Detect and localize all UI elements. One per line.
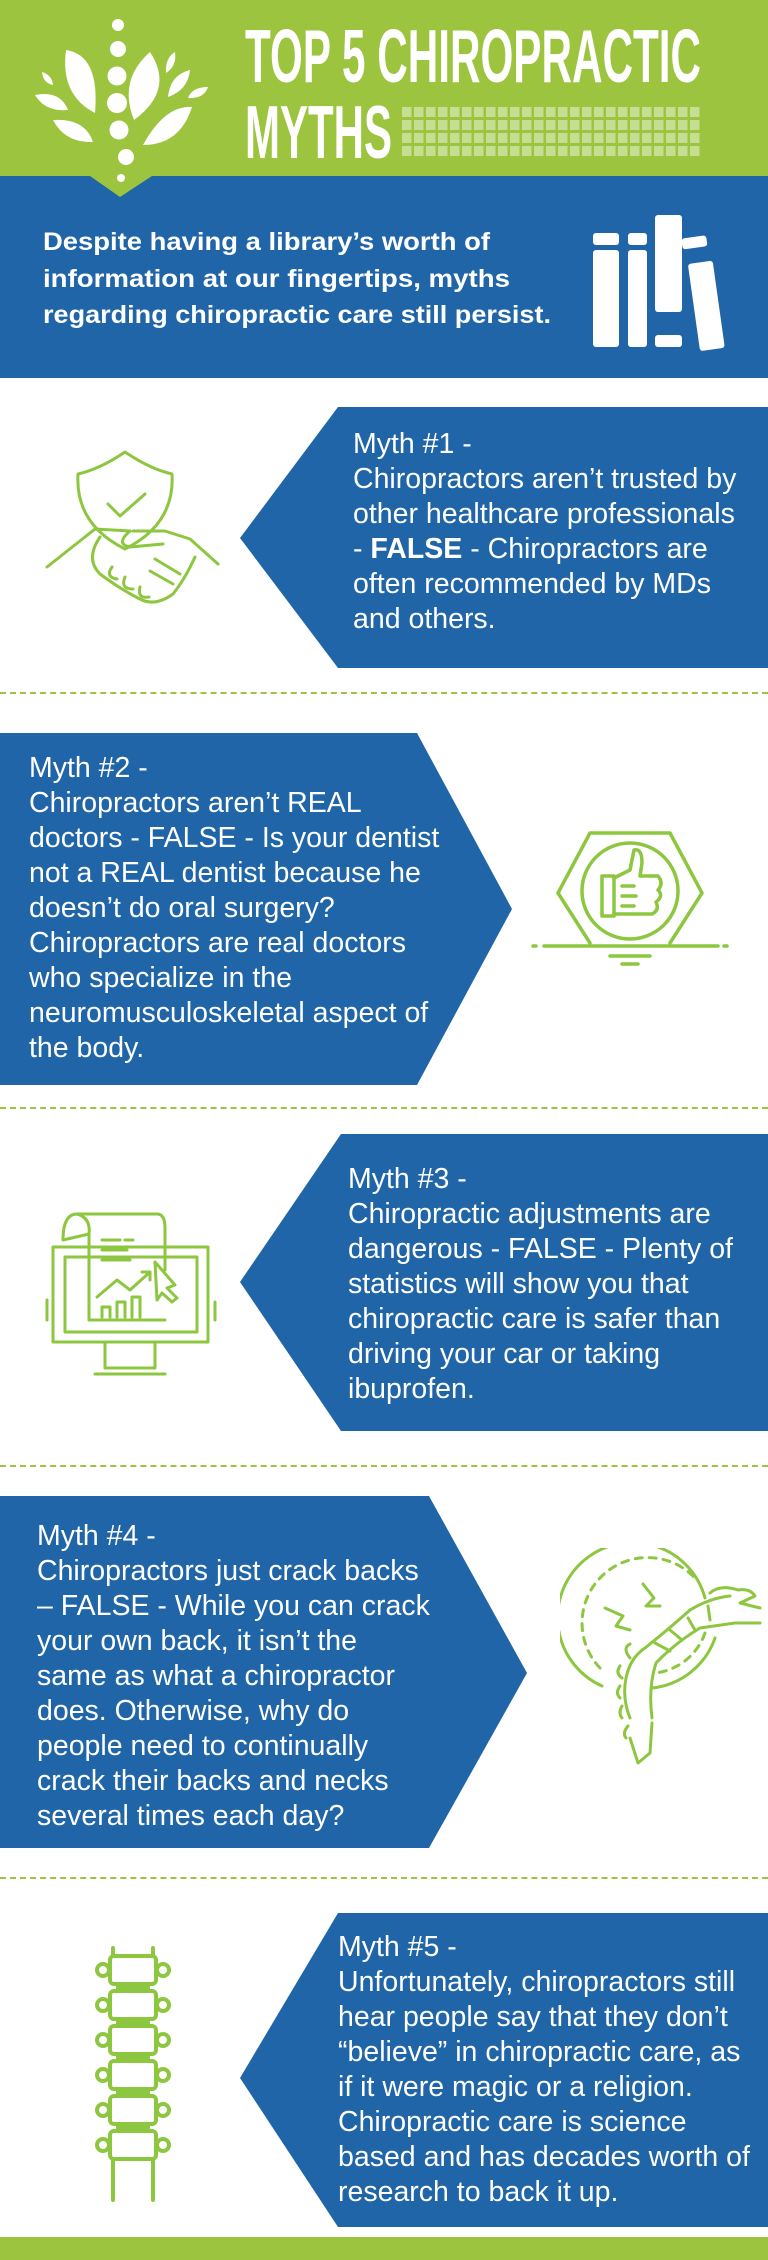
myth 5 text: research to back it up. — [338, 2176, 618, 2208]
header notch pointer — [90, 176, 152, 197]
myth 3 text: statistics will show you that — [348, 1268, 689, 1300]
panel: myth 5 — [95, 1913, 768, 2227]
footer: green band — [0, 2237, 768, 2260]
myth 4 text: several times each day? — [37, 1800, 344, 1832]
myth 4 text: Myth #4 - — [37, 1520, 156, 1552]
myth 2 text: Myth #2 - — [29, 752, 148, 784]
myth 1 text: and others. — [353, 603, 496, 635]
icon: hexagon thumbs up — [531, 831, 729, 966]
panel: myth 1 — [45, 407, 768, 668]
myth 2 text: neuromusculoskeletal aspect of — [29, 997, 428, 1029]
header: green band — [0, 0, 768, 177]
myth 5 text: if it were magic or a religion. — [338, 2071, 693, 2103]
panel: myth 2 — [0, 733, 729, 1085]
myth 5 text: Myth #5 - — [338, 1931, 457, 1963]
myth 4 text — [37, 1520, 430, 1832]
myth 1 text: - FALSE - Chiropractors are — [353, 533, 708, 565]
icon: spine column — [95, 1946, 171, 2202]
myth 3 arrow shape — [240, 1134, 768, 1431]
myth 2 text: doesn’t do oral surgery? — [29, 892, 335, 924]
intro text: regarding chiropractic care still persist. — [43, 301, 551, 329]
myth 1 text: often recommended by MDs — [353, 568, 711, 600]
myth 3 text: dangerous - FALSE - Plenty of — [348, 1233, 733, 1265]
myth 4 text: people need to continually — [37, 1730, 368, 1762]
icon: spine in circle — [560, 1548, 762, 1764]
myth 4 text: Chiropractors just crack backs — [37, 1555, 419, 1587]
intro text: Despite having a library’s worth of — [43, 228, 491, 256]
myth 3 text: ibuprofen. — [348, 1373, 475, 1405]
title — [245, 14, 701, 174]
myth 1 arrow shape — [240, 407, 768, 668]
myth 5 text: Chiropractic care is science — [338, 2106, 686, 2138]
myth 4 text: crack their backs and necks — [37, 1765, 389, 1797]
panel: myth 3 — [46, 1134, 768, 1431]
myth 2 arrow shape — [0, 733, 512, 1085]
myth 2 text — [29, 752, 440, 1064]
myth 2 text: Chiropractors aren’t REAL — [29, 787, 362, 819]
myth 2 text: who specialize in the — [29, 962, 292, 994]
myth 4 arrow shape — [0, 1496, 527, 1848]
intro: blue band — [0, 176, 768, 378]
myth 5 text: Unfortunately, chiropractors still — [338, 1966, 735, 1998]
myth 3 text: Chiropractic adjustments are — [348, 1198, 711, 1230]
myth 5 text: hear people say that they don’t — [338, 2001, 728, 2033]
myth 5 text: based and has decades worth of — [338, 2141, 750, 2173]
myth 3 text: driving your car or taking — [348, 1338, 660, 1370]
myth 4 text: does. Otherwise, why do — [37, 1695, 349, 1727]
myth 5 arrow shape — [240, 1913, 768, 2227]
myth 1 text: Myth #1 - — [353, 428, 472, 460]
myth 2 text: Chiropractors are real doctors — [29, 927, 406, 959]
intro text — [43, 228, 551, 329]
myth 3 text — [348, 1163, 733, 1405]
myth 1 text: Chiropractors aren’t trusted by — [353, 463, 736, 495]
myth 4 text: same as what a chiropractor — [37, 1660, 395, 1692]
myth 5 text — [338, 1931, 750, 2208]
myth 3 text: Myth #3 - — [348, 1163, 467, 1195]
myth 2 text: doctors - FALSE - Is your dentist — [29, 822, 439, 854]
myth 1 text: other healthcare professionals — [353, 498, 735, 530]
icon: shield handshake — [45, 450, 220, 604]
icon: leaf logo — [35, 19, 208, 182]
myth 2 text: the body. — [29, 1032, 144, 1064]
intro text: information at our fingertips, myths — [43, 265, 510, 293]
myth 4 text: your own back, it isn’t the — [37, 1625, 357, 1657]
icon: books — [593, 215, 724, 351]
title: MYTHS — [245, 90, 392, 174]
icon: monitor with report — [46, 1212, 216, 1376]
myth 3 text: chiropractic care is safer than — [348, 1303, 720, 1335]
myth 5 text: “believe” in chiropractic care, as — [338, 2036, 740, 2068]
myth 2 text: not a REAL dentist because he — [29, 857, 421, 889]
myth 1 text — [353, 428, 736, 635]
panel: myth 4 — [0, 1496, 762, 1848]
myth 4 text: – FALSE - While you can crack — [37, 1590, 430, 1622]
